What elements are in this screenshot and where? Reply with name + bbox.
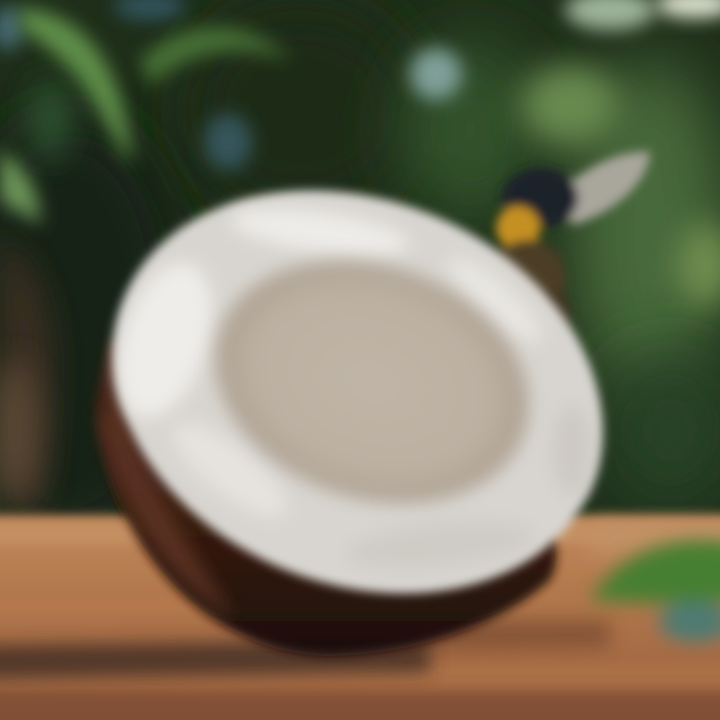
coconut white rim [52, 120, 664, 664]
icon: leaf [590, 540, 720, 642]
coconut [52, 120, 664, 664]
table: wooden surface [0, 515, 720, 720]
coconut shell [96, 340, 557, 656]
tree trunk [0, 240, 52, 510]
background: forest foliage [0, 0, 720, 550]
table shadow [0, 640, 430, 680]
palm fronds [20, 8, 132, 165]
coconut flesh centre [184, 222, 560, 542]
icon: bee [490, 152, 650, 334]
